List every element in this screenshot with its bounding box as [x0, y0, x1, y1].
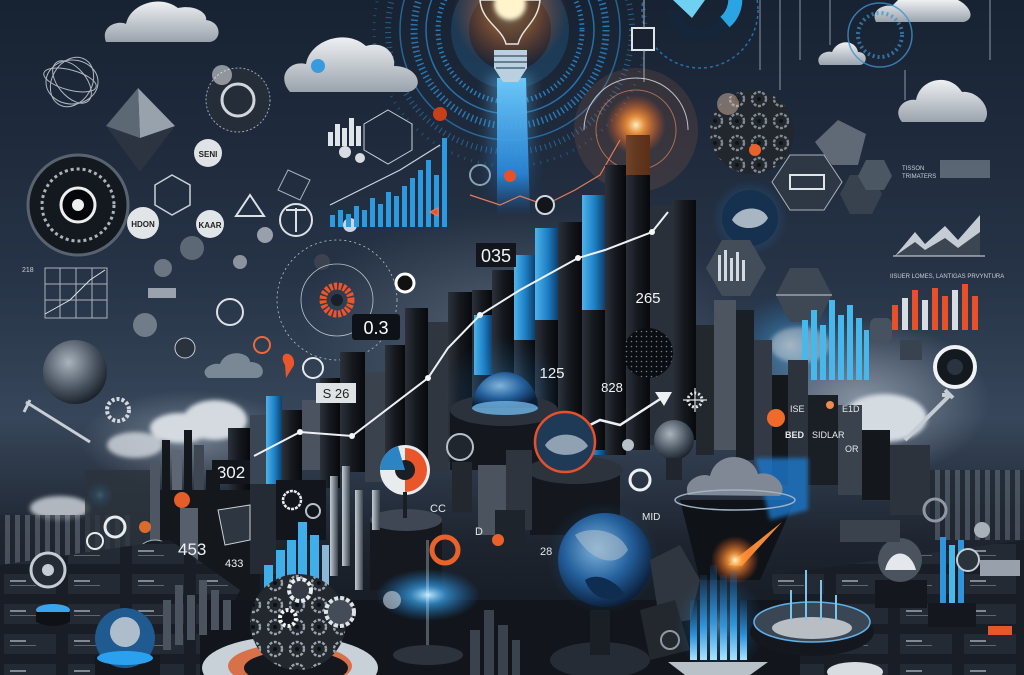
value labels: 828	[601, 380, 623, 395]
orange target	[277, 240, 397, 360]
growth line	[254, 212, 668, 456]
right hex grid	[772, 120, 892, 322]
orange ring glow	[574, 68, 698, 192]
city labels: E1D	[842, 404, 860, 414]
hexagon labels	[127, 139, 357, 277]
red ring globe	[527, 412, 623, 535]
right icons	[827, 499, 1020, 675]
blue small bars bottom left	[264, 522, 329, 600]
city left	[0, 430, 326, 600]
world map text: TISSON	[902, 166, 924, 172]
spark blue bottom center	[376, 540, 480, 665]
bottom tiles left	[0, 540, 240, 675]
rings top right	[760, 0, 990, 100]
value labels	[212, 243, 661, 484]
moon sphere	[622, 420, 694, 490]
grid chart left: 218	[22, 267, 34, 274]
hexagon labels: SENI	[199, 150, 217, 159]
bottom center dark	[200, 600, 800, 675]
cloud top left	[105, 1, 219, 42]
orange bar chart	[890, 274, 1004, 330]
arrow	[560, 392, 672, 440]
blue rising bar chart	[330, 138, 447, 227]
blue dome bottom left	[95, 608, 160, 675]
diamond icon	[106, 88, 175, 172]
bottom tiles right	[770, 540, 1024, 675]
comet	[711, 522, 782, 584]
value labels: 302	[217, 463, 245, 482]
city labels	[767, 401, 860, 454]
value label 0.3	[352, 314, 400, 340]
sphere top left center	[206, 65, 270, 132]
blue crystal light	[668, 565, 768, 675]
radial rings around bulb	[374, 0, 646, 166]
orange arrow line chart	[396, 107, 620, 292]
orange bar chart: IISUER LOMES, LANTIGAS PRVYNTURA	[890, 274, 1004, 280]
dotted sphere	[623, 328, 673, 378]
city right	[696, 300, 1024, 540]
gear sphere platform	[202, 574, 378, 675]
blue dome on pedestal	[445, 335, 565, 470]
top donut chart	[632, 0, 758, 82]
city labels: BED	[785, 430, 805, 440]
world map text	[902, 160, 990, 180]
right platform	[750, 570, 874, 656]
tall silver bars	[330, 466, 380, 590]
small cloud	[818, 42, 866, 65]
city labels: OR	[845, 444, 859, 454]
value labels: 125	[539, 365, 565, 382]
hexagon labels: KAAR	[198, 221, 222, 230]
light beam	[488, 75, 532, 215]
dark sphere with gears	[710, 90, 794, 174]
blue pod left	[36, 604, 70, 626]
cloud on pedestal	[642, 457, 808, 580]
pie chart on pedestal: CC	[430, 503, 446, 515]
dial icon	[28, 155, 128, 255]
small bar chart icon	[328, 110, 412, 164]
world map text: TRIMATERS	[902, 174, 936, 180]
horizon haze	[80, 210, 990, 509]
pie chart on pedestal	[370, 445, 446, 590]
light bulb	[452, 0, 568, 82]
cloud center	[284, 37, 418, 92]
value labels: S 26	[323, 386, 349, 401]
scribble sphere	[41, 49, 102, 115]
area chart right	[893, 215, 985, 256]
blue globe right	[712, 180, 788, 256]
bar cluster bottom center	[432, 510, 552, 675]
bar cluster bottom center: D	[475, 526, 483, 538]
bar cluster bottom center: 28	[540, 546, 552, 558]
city labels: SIDLAR	[812, 430, 845, 440]
value labels: 035	[481, 246, 511, 266]
value labels: 265	[635, 290, 661, 307]
blue bars right	[802, 300, 869, 380]
value label 0.3: 0.3	[363, 318, 389, 338]
spark	[683, 388, 707, 412]
city labels: ISE	[790, 404, 805, 414]
left sphere	[43, 340, 107, 404]
cloud right	[898, 80, 987, 122]
cloud on pedestal: MID	[642, 512, 660, 523]
clouds behind city left	[30, 400, 247, 520]
hex panel center-right	[706, 240, 766, 296]
small dark city mid	[447, 434, 532, 535]
grey bars left	[163, 580, 231, 650]
ring icons right	[870, 318, 975, 440]
big blue globe	[547, 502, 659, 675]
lab icons left	[24, 288, 323, 442]
grid chart left	[22, 267, 107, 318]
rock pile	[640, 545, 700, 660]
numbers bottom left: 433	[225, 558, 243, 570]
clouds behind city right	[770, 327, 927, 442]
hexagon labels: HDON	[131, 220, 155, 229]
main bar chart	[228, 135, 696, 505]
cloud top right	[875, 0, 971, 22]
numbers bottom left: 453	[178, 540, 206, 559]
numbers bottom left	[31, 540, 243, 587]
